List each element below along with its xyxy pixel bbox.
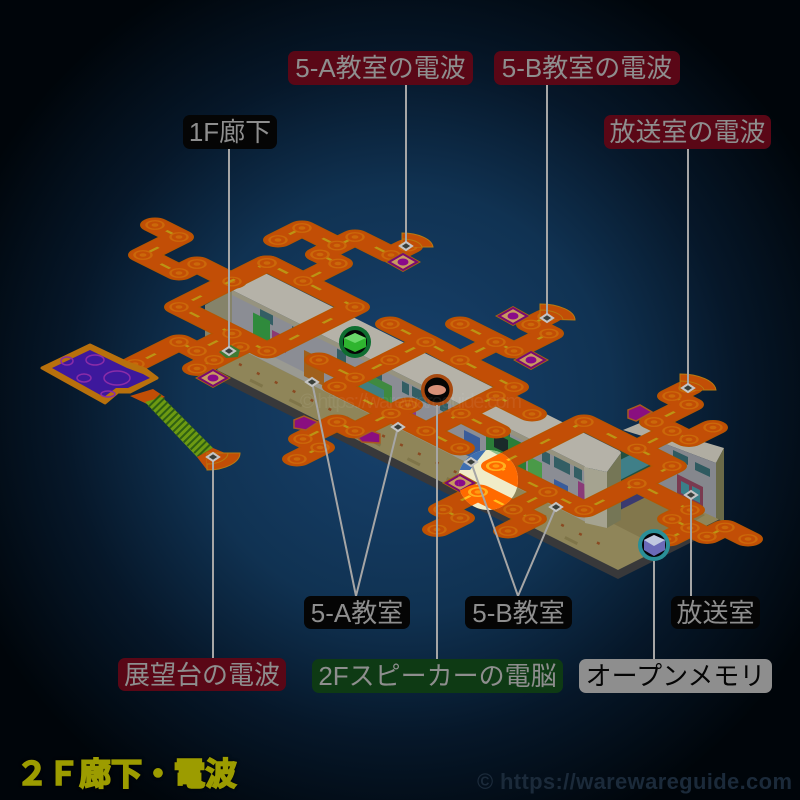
label: open memory: オープンメモリ [586,661,765,691]
label: 5-B classroom: 5-B教室 [472,598,565,628]
signal fans [197,233,716,470]
icon: green program [339,326,371,358]
watermark: © https://warewareguide.com [300,391,522,413]
main wall [232,290,588,523]
floor [217,345,724,570]
left alcove [205,290,232,358]
label: broadcast room: 放送室 [676,598,755,628]
pillar [584,451,621,472]
right wing roof [623,423,724,463]
floor plank lines [239,364,600,545]
building and floor [205,273,724,579]
label: observatory signal: 展望台の電波 [124,660,280,690]
back area behind pillar [620,432,660,520]
terminals [195,252,549,493]
windows [260,309,582,482]
leader end dots [207,242,697,511]
observatory room [42,345,157,403]
floor side [217,370,724,579]
label: 2F speaker cyber brain: 2Fスピーカーの電脳 [318,661,557,691]
label: 5-B classroom signal: 5-B教室の電波 [502,53,672,83]
label: 5-A classroom: 5-A教室 [311,598,403,628]
label: 1F corridor: 1F廊下 [189,117,271,147]
spotlight [458,450,518,510]
icon: speaker cyber brain [421,374,453,406]
roof [232,273,620,468]
icon: open memory [638,529,670,561]
copyright: © https://warewareguide.com [477,769,792,794]
title: ２Ｆ廊下・電波 [16,756,237,792]
right wing wall [655,440,716,518]
leader lines [213,85,691,659]
magenta steps [294,405,652,443]
green stairs [130,389,213,457]
label: 5-A classroom signal: 5-A教室の電波 [295,53,466,83]
1F corridor green tile [219,345,240,358]
doors [253,312,270,351]
corridor network [135,225,748,539]
label: broadcast room signal: 放送室の電波 [609,117,766,147]
